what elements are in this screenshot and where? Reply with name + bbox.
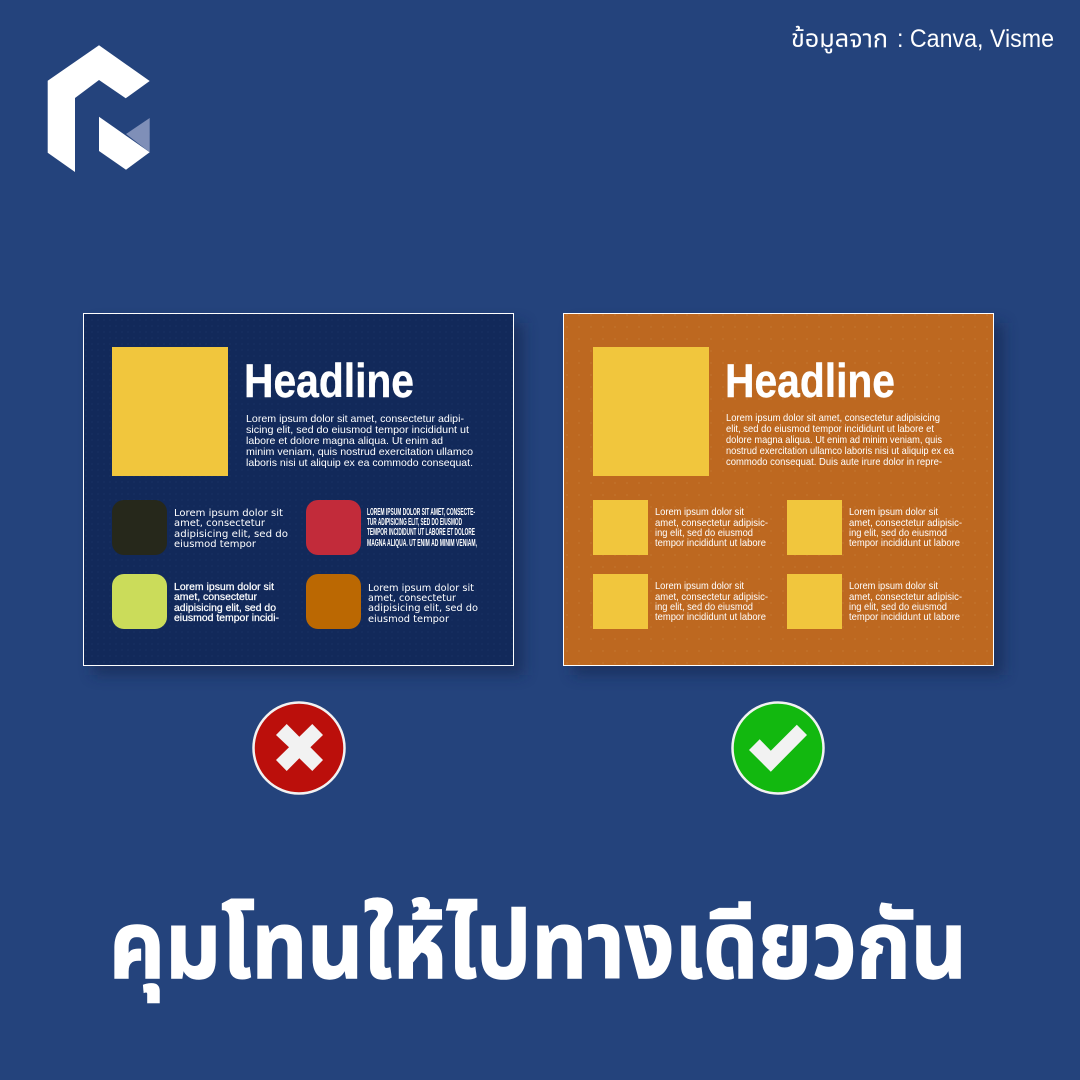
text block: bold: Lorem ipsum dolor sit (174, 582, 274, 593)
dark swatch (112, 500, 167, 555)
body text: minim veniam, quis nostrud exercitation ullamco (246, 446, 473, 458)
text block 4: tempor incididunt ut labore (849, 612, 960, 623)
text block: wide font: Lorem ipsum dolor sit (174, 508, 283, 519)
lime swatch (112, 574, 167, 629)
body text: labore et dolore magna aliqua. Ut enim ad (246, 435, 443, 447)
text block 2 (849, 507, 962, 549)
text block 3 (655, 581, 768, 623)
panel: bad example: LOREM IPSUM DOLOR SIT AMET, CONSECTE- (367, 507, 475, 518)
body text: dolore magna aliqua. Ut enim ad minim veniam, quis (726, 434, 942, 446)
panel: good example (564, 314, 1004, 675)
body text: Lorem ipsum dolor sit amet, consectetur adipi- (246, 413, 465, 425)
panel: bad example (84, 314, 524, 675)
logo (48, 45, 150, 172)
headline: Headline (725, 354, 895, 407)
body text: sicing elit, sed do eiusmod tempor incididunt ut (246, 424, 469, 436)
text block: wide font: eiusmod tempor (174, 539, 257, 550)
text block 3: amet, consectetur adipisic- (655, 592, 768, 603)
text block 4 (849, 581, 962, 623)
text block 2: tempor incididunt ut labore (849, 538, 960, 549)
panel: bad example: TEMPOR INCIDIDUNT UT LABORE ET DOLORE (367, 527, 475, 538)
text block: bold: amet, consectetur (174, 592, 258, 603)
text block 1: tempor incididunt ut labore (655, 538, 766, 549)
text block: bold: adipisicing elit, sed do (174, 603, 276, 614)
text block 1: amet, consectetur adipisic- (655, 518, 768, 529)
headline: Headline (244, 354, 414, 407)
icon: green check (732, 702, 824, 794)
text block: geometric: eiusmod tempor (368, 614, 450, 625)
image placeholder (593, 347, 709, 476)
amber swatch (306, 574, 361, 629)
text block 4: amet, consectetur adipisic- (849, 592, 962, 603)
body text (246, 413, 473, 469)
text block: geometric: amet, consectetur (368, 593, 457, 604)
text block 1: Lorem ipsum dolor sit (655, 507, 744, 518)
text block 1: ing elit, sed do eiusmod (655, 528, 753, 539)
image placeholder (112, 347, 228, 476)
swatch 2 (787, 500, 842, 555)
body text: laboris nisi ut aliquip ex ea commodo consequat. (246, 457, 473, 469)
swatch 1 (593, 500, 648, 555)
text block 4: Lorem ipsum dolor sit (849, 581, 938, 592)
text block: geometric: adipisicing elit, sed do (368, 603, 478, 614)
text block 3: tempor incididunt ut labore (655, 612, 766, 623)
text block: bold (174, 582, 279, 624)
body text: commodo consequat. Duis aute irure dolor in repre- (726, 456, 942, 468)
text block: condensed caps: TUR ADIPISICING ELIT, SED DO EIUSMOD (367, 517, 462, 528)
title: คุมโทนให้ไปทางเดียวกัน (109, 893, 967, 1003)
swatch 4 (787, 574, 842, 629)
text block 2: amet, consectetur adipisic- (849, 518, 962, 529)
text block: geometric (368, 583, 478, 625)
text block: wide font (174, 508, 288, 550)
text block: wide font: amet, consectetur (174, 518, 266, 529)
swatch 3 (593, 574, 648, 629)
text block: wide font: adipisicing elit, sed do (174, 529, 288, 540)
text block: condensed caps (367, 507, 477, 549)
body text: nostrud exercitation ullamco laboris nisi ut aliquip ex ea (726, 445, 954, 457)
source credit: ข้อมูลจาก (791, 25, 888, 54)
text block: bold: eiusmod tempor incidi- (174, 613, 279, 624)
text block 2: ing elit, sed do eiusmod (849, 528, 947, 539)
body text: Lorem ipsum dolor sit amet, consectetur adipisicing (726, 412, 940, 424)
text block: condensed caps: MAGNA ALIQUA. UT ENIM AD MINIM VENIAM, (367, 538, 477, 549)
source credit: : Canva, Visme (897, 25, 1054, 53)
source credit (791, 25, 1054, 54)
red swatch (306, 500, 361, 555)
body text (726, 412, 954, 468)
icon: red cross (254, 702, 344, 794)
text block 4: ing elit, sed do eiusmod (849, 602, 947, 613)
text block 3: ing elit, sed do eiusmod (655, 602, 753, 613)
text block 3: Lorem ipsum dolor sit (655, 581, 744, 592)
text block 1 (655, 507, 768, 549)
text block 2: Lorem ipsum dolor sit (849, 507, 938, 518)
body text: elit, sed do eiusmod tempor incididunt ut labore et (726, 423, 934, 435)
text block: geometric: Lorem ipsum dolor sit (368, 583, 474, 594)
